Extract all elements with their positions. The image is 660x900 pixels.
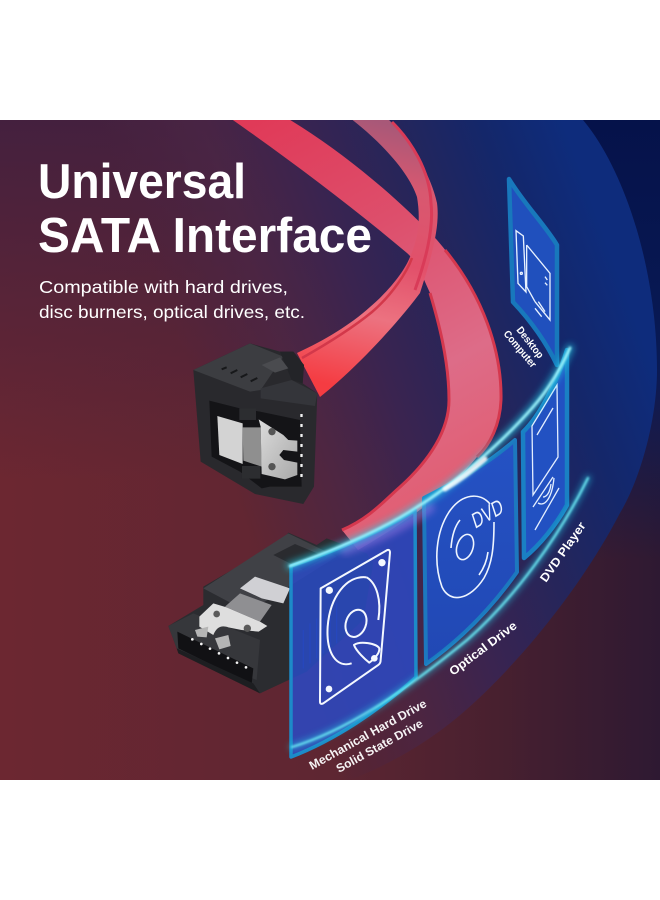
label: DVD player: DVD Player (537, 519, 589, 585)
icon: DVD disc: DVD (469, 495, 506, 534)
description text (39, 277, 305, 322)
title: SATA Interface (38, 209, 372, 263)
label: hard drives: Solid State Drive (334, 716, 426, 776)
connector pins (191, 638, 247, 669)
panel: hard drive (291, 510, 416, 757)
lower SATA connector (168, 533, 373, 693)
near red cable (297, 118, 438, 397)
infographic canvas (0, 120, 660, 780)
icon: DVD disc (437, 495, 506, 598)
background panel (0, 120, 660, 780)
glow arc: upper (290, 348, 570, 566)
glow arc: lower (292, 478, 588, 747)
title: Universal (38, 155, 246, 209)
metal latch (217, 408, 297, 479)
icon: desktop computer (516, 231, 550, 320)
label: desktop computer: Desktop (514, 324, 546, 361)
description text: Compatible with hard drives, (39, 277, 288, 297)
description text: disc burners, optical drives, etc. (39, 302, 305, 322)
panel: desktop computer (509, 179, 557, 365)
far pink cable (230, 118, 501, 550)
panel: optical drive (424, 440, 517, 664)
label: optical drive: Optical Drive (446, 618, 520, 678)
label: hard drives: Mechanical Hard Drive (307, 696, 429, 773)
metal latch (195, 577, 290, 649)
connector pins (300, 414, 303, 477)
upper SATA connector (193, 343, 317, 504)
icon: hard disk (320, 550, 390, 704)
label: desktop computer: Computer (501, 328, 539, 370)
title (38, 155, 372, 263)
panel: DVD player (523, 350, 567, 558)
icon: DVD player (532, 385, 559, 530)
